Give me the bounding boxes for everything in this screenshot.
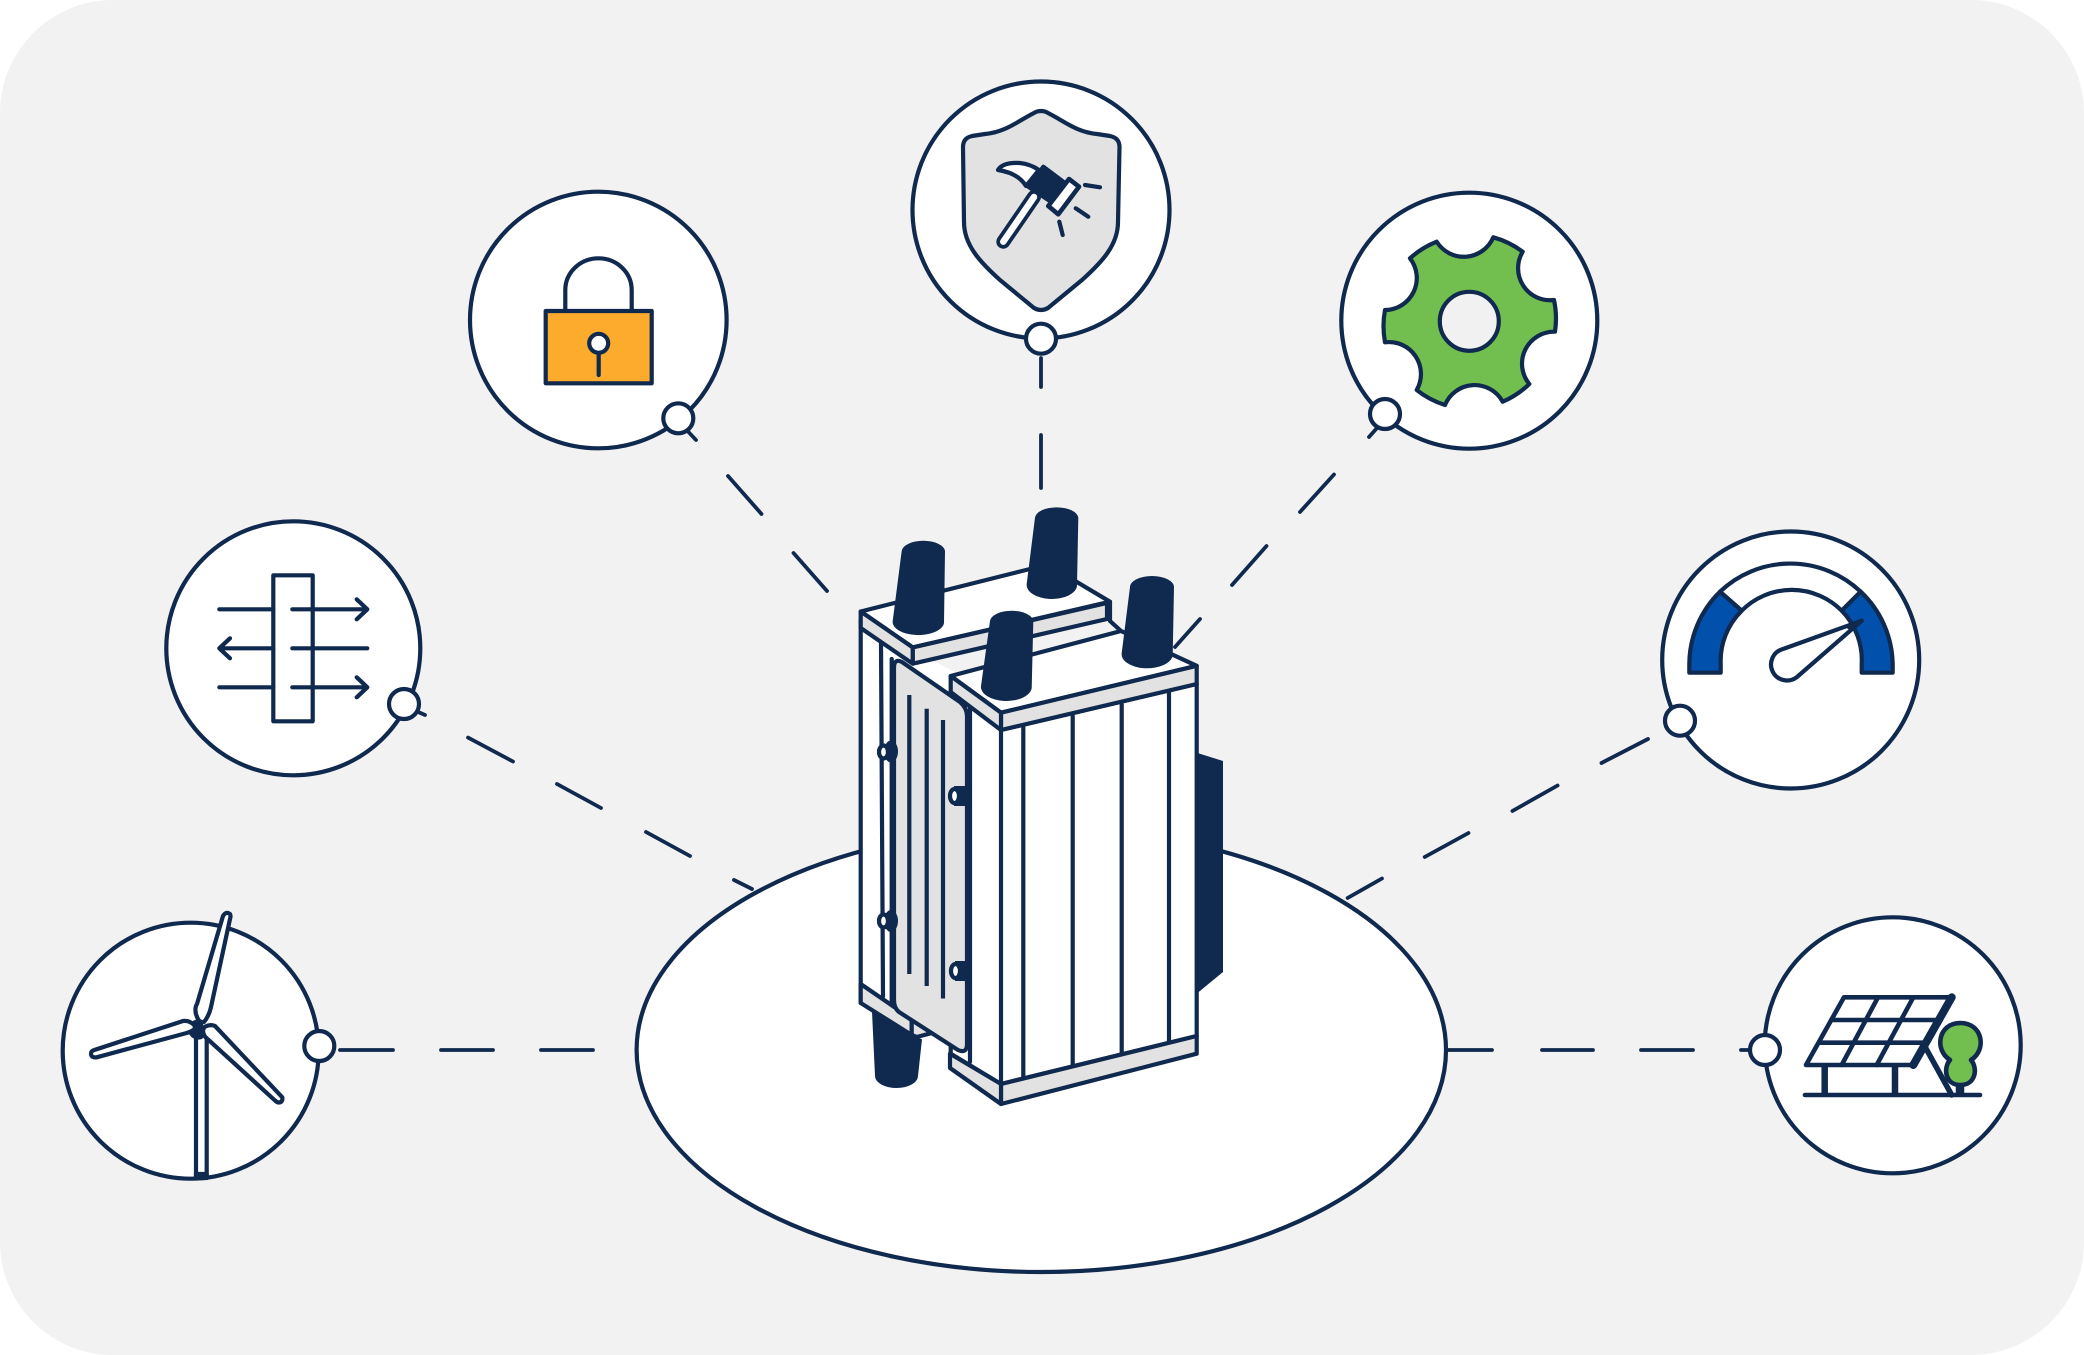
door bolts <box>879 740 970 981</box>
hinged door <box>894 661 967 1051</box>
icon: busbar with arrows <box>219 575 367 721</box>
circle: shield with hammer <box>912 82 1170 338</box>
front cabinet body <box>950 631 1197 1104</box>
circle: wind turbine <box>63 913 319 1179</box>
icon: pick hammer <box>998 163 1100 242</box>
platform ellipse <box>637 828 1446 1272</box>
icon: gear <box>1384 237 1556 405</box>
circle: padlock <box>470 192 727 448</box>
upper bushings <box>893 507 1174 701</box>
dashed connector lines <box>340 358 1751 1050</box>
icon: wind turbine <box>91 913 282 1178</box>
circle: gear <box>1341 193 1597 449</box>
icon: padlock <box>546 258 652 383</box>
rear cabinet body <box>861 565 1121 1060</box>
circle: flow arrows <box>166 521 420 775</box>
transformer cabinet <box>861 507 1223 1104</box>
icon: solar panel and tree <box>1805 997 1981 1095</box>
circle: speed gauge <box>1662 532 1919 788</box>
circle: solar panel <box>1765 917 2021 1173</box>
icon: shield <box>963 111 1120 310</box>
lower bushing <box>872 1005 923 1088</box>
rear heat sink <box>1197 753 1223 994</box>
icon: gauge <box>1689 564 1893 680</box>
connector nodes <box>304 324 1780 1065</box>
